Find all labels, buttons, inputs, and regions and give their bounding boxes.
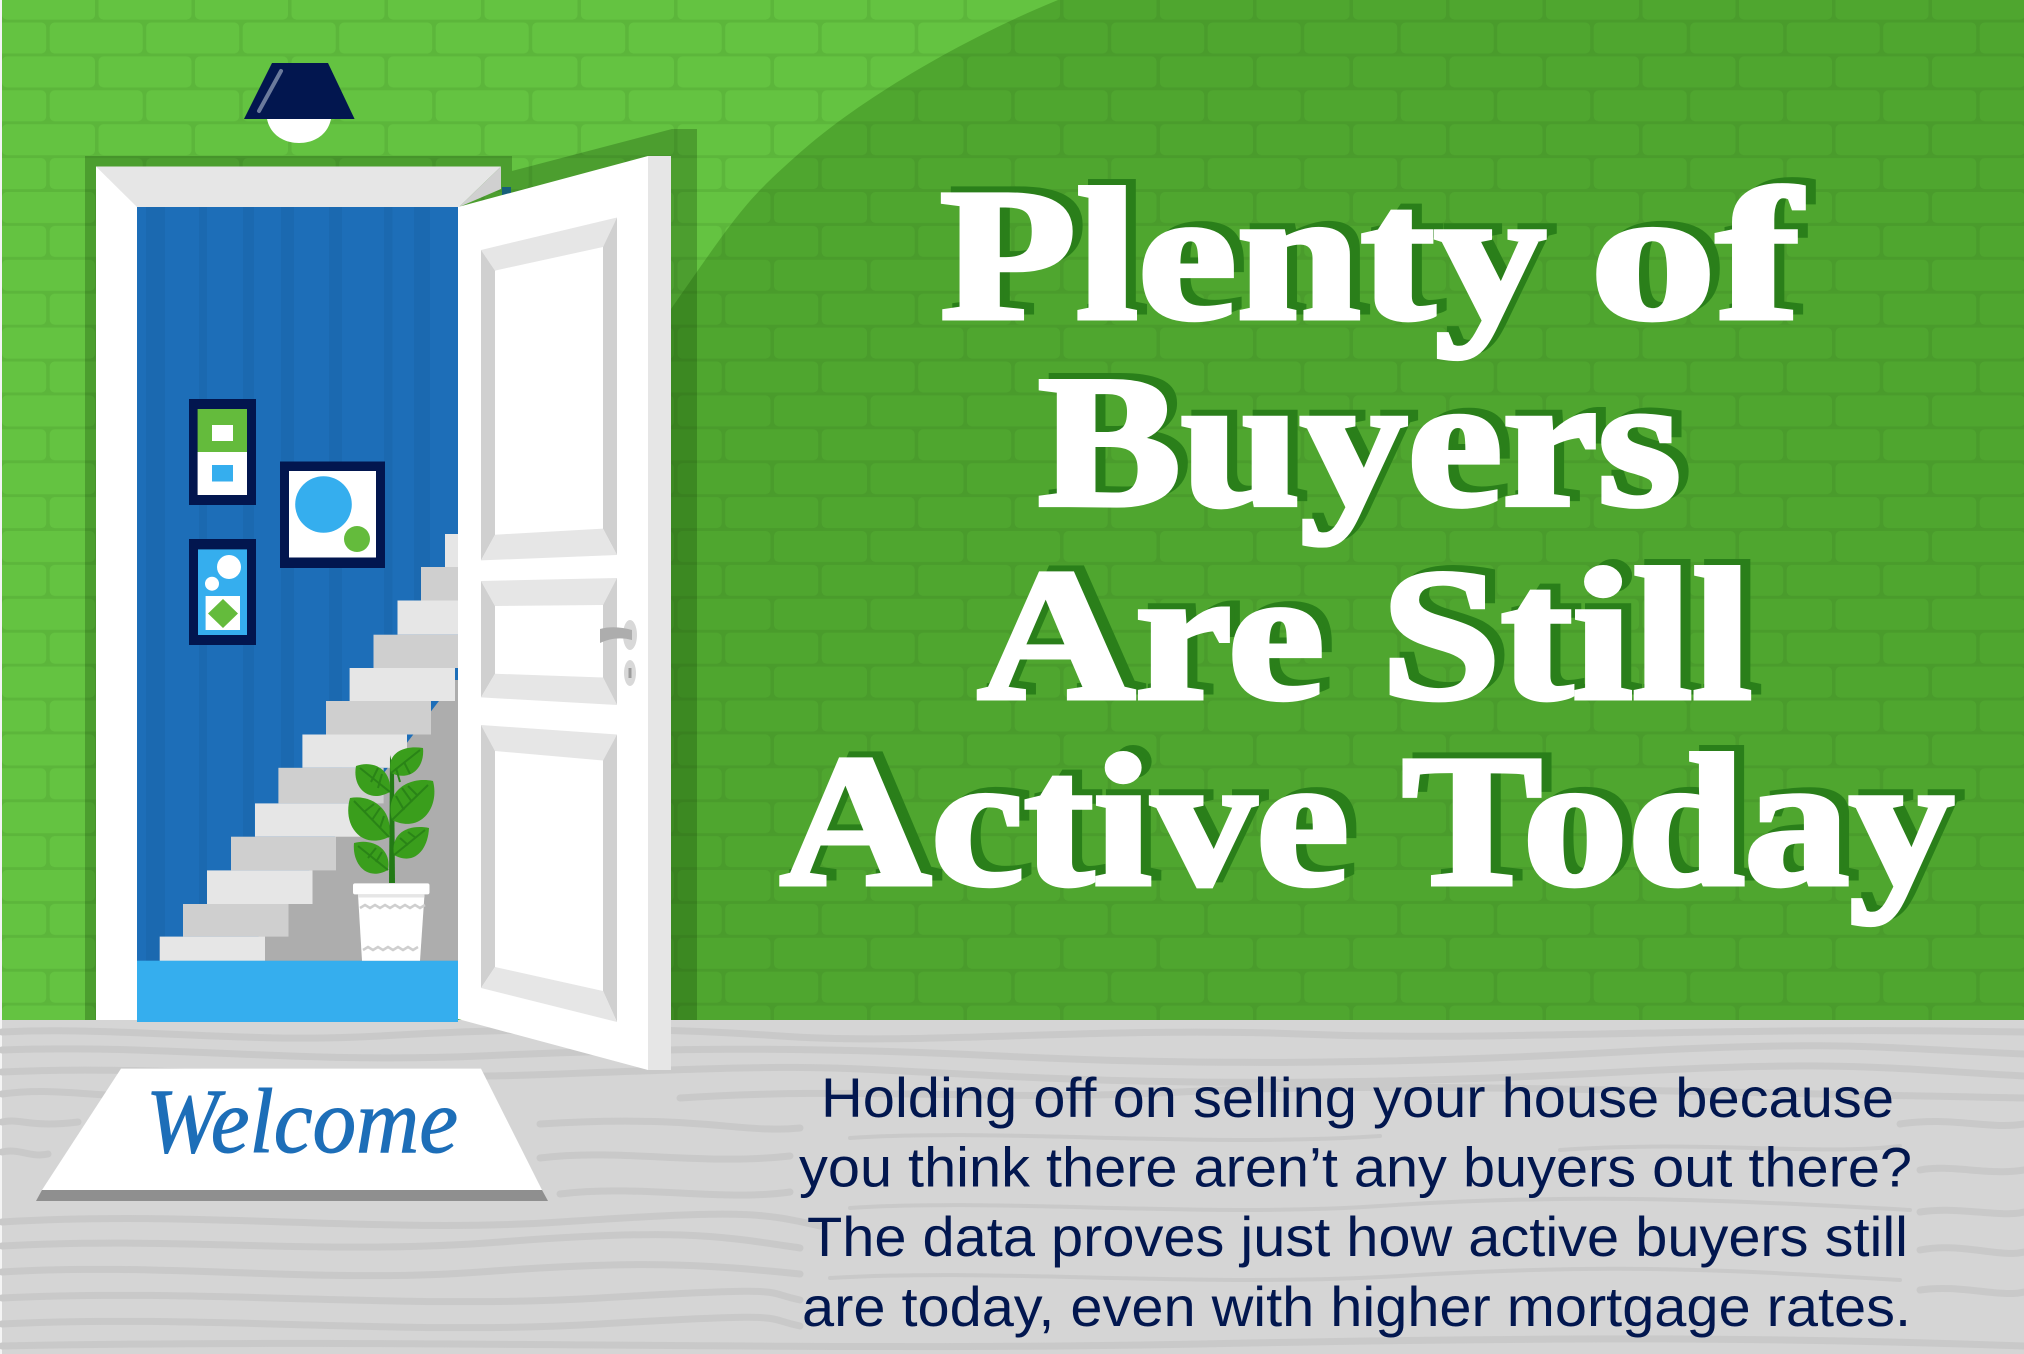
welcome mat: [36, 1069, 548, 1201]
plant pot: [358, 894, 424, 961]
lamp bulb: [267, 119, 331, 143]
title shadow: Plenty: [950, 144, 1556, 353]
plant stem: [389, 755, 395, 883]
welcome text: Welcome: [146, 1070, 458, 1172]
wall lamp: [244, 63, 355, 143]
title shadow: Are: [988, 524, 1334, 733]
door lower panel: [481, 725, 617, 1022]
door middle panel: [481, 578, 617, 705]
plant leaves: [348, 747, 434, 874]
intro paragraph: [799, 1066, 1912, 1338]
intro paragraph: are today, even with higher mortgage rates.: [802, 1275, 1911, 1338]
title shadow: [790, 144, 1964, 919]
intro paragraph: Holding off on selling your house because: [821, 1066, 1894, 1129]
title lettering: Still: [1381, 530, 1752, 739]
title lettering: [780, 150, 1954, 925]
staircase: [160, 534, 458, 961]
framed picture: blue with diamond: [189, 539, 256, 645]
interior hallway wall: [137, 207, 458, 962]
door frame: [96, 166, 511, 1020]
potted plant: [348, 747, 434, 961]
title lettering: Buyers: [1038, 337, 1681, 546]
title: [780, 144, 1964, 925]
title lettering: Plenty: [940, 150, 1546, 359]
framed picture: circles: [280, 462, 385, 568]
lamp shade: [244, 63, 355, 119]
title shadow: Buyers: [1048, 331, 1691, 540]
intro paragraph: The data proves just how active buyers still: [807, 1205, 1908, 1268]
title shadow: Still: [1391, 524, 1762, 733]
door and frame shadow on wall: [85, 129, 697, 1020]
title shadow: of: [1600, 144, 1813, 353]
title lettering: Are: [978, 530, 1324, 739]
framed picture: green and white: [189, 399, 256, 505]
door upper panel: [481, 218, 617, 560]
title lettering: of: [1590, 150, 1803, 359]
title lettering: Today: [1402, 716, 1954, 925]
wooden floor: [2, 1020, 2024, 1354]
title shadow: Today: [1412, 710, 1964, 919]
entry floor: [137, 961, 458, 1022]
intro paragraph: you think there aren’t any buyers out there?: [799, 1136, 1912, 1198]
title lettering: Active: [780, 716, 1349, 925]
open white door: [458, 156, 671, 1070]
door handle: [600, 620, 637, 686]
title shadow: Active: [790, 710, 1359, 919]
